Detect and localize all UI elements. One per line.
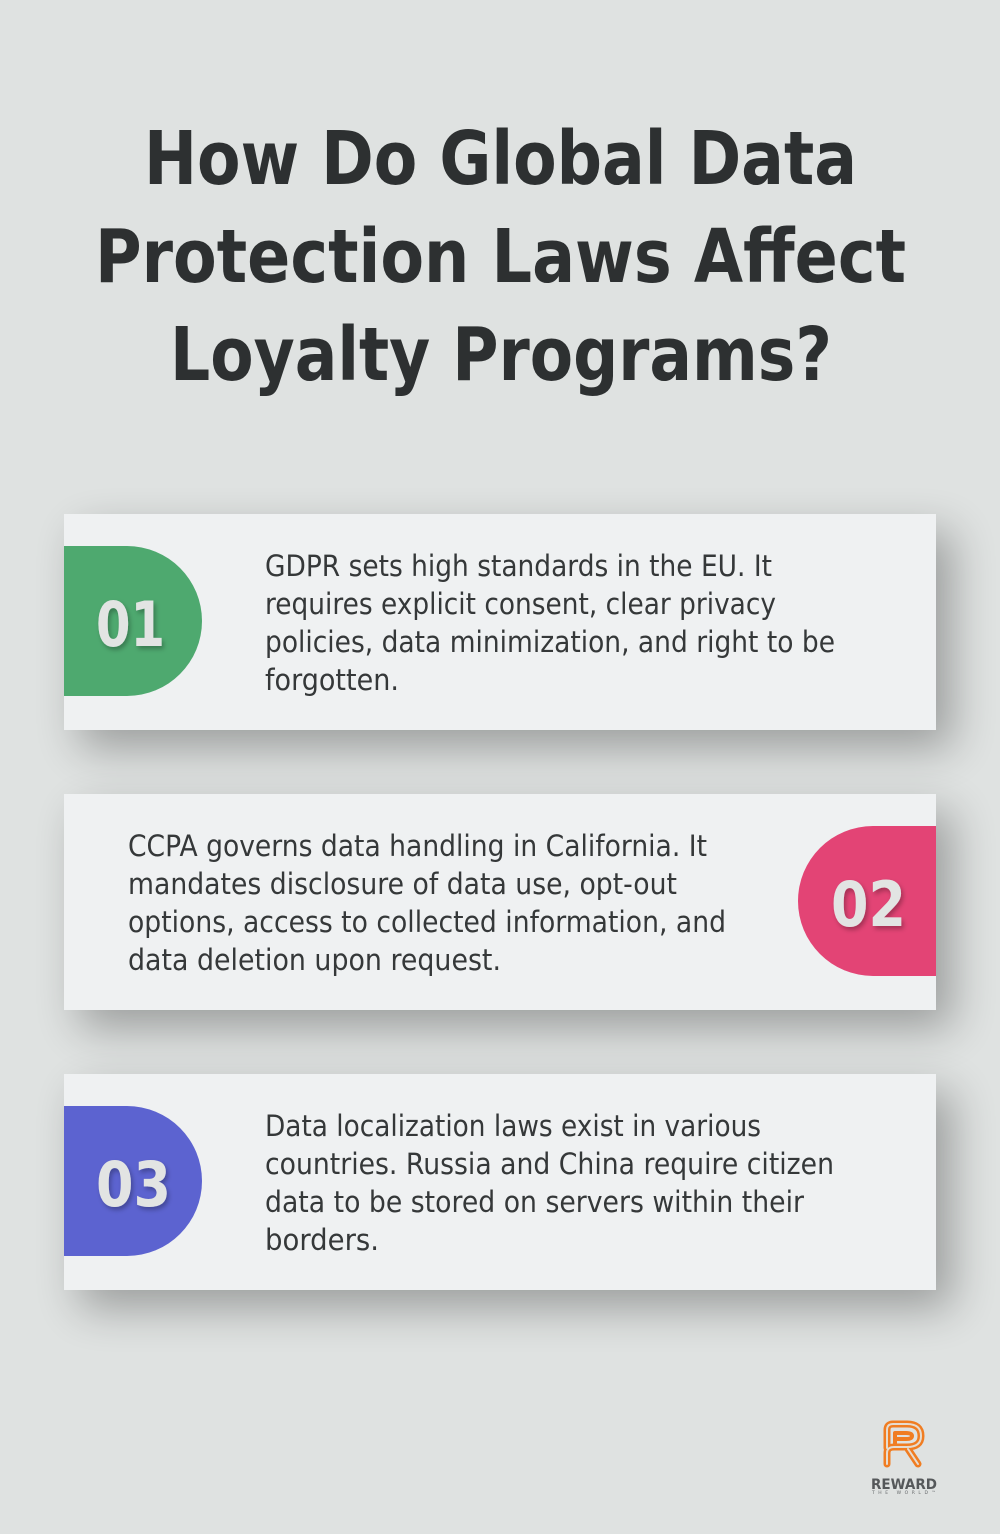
badge: 01 — [64, 546, 202, 696]
logo wordmark: REWARD — [871, 1477, 937, 1493]
text: data localization description: countries. Russia and China require citizen — [265, 1147, 834, 1181]
text: data localization description: Data localization laws exist in various — [265, 1109, 761, 1143]
text: CCPA description: CCPA governs data handling in California. It — [128, 829, 707, 863]
text: data localization description — [265, 1109, 834, 1257]
text: GDPR description: requires explicit consent, clear privacy — [265, 587, 776, 621]
logo tagline: THE WORLD™ — [871, 1490, 936, 1496]
icon: orange R — [887, 1424, 921, 1464]
text: CCPA description: mandates disclosure of data use, opt-out — [128, 867, 677, 901]
text: GDPR description: GDPR sets high standards in the EU. It — [265, 549, 772, 583]
badge: 02 — [798, 826, 936, 976]
badge: 01: 01 — [96, 588, 165, 661]
text: CCPA description: data deletion upon request. — [128, 943, 501, 977]
text: CCPA description — [128, 829, 726, 977]
title: How Do Global Data — [144, 116, 857, 202]
text: GDPR description: forgotten. — [265, 663, 399, 697]
panel: CCPA card — [64, 794, 952, 1028]
text: data localization description: data to be stored on servers within their — [265, 1185, 805, 1219]
badge: 03: 03 — [96, 1148, 171, 1221]
title: Loyalty Programs? — [170, 312, 832, 398]
title — [95, 116, 906, 398]
logo: Reward the World — [871, 1424, 937, 1496]
panel: GDPR card — [64, 514, 952, 748]
text: CCPA description: options, access to collected information, and — [128, 905, 726, 939]
text: GDPR description: policies, data minimization, and right to be — [265, 625, 835, 659]
text: GDPR description — [265, 549, 835, 697]
badge: 03 — [64, 1106, 202, 1256]
panel: data localization card — [64, 1074, 952, 1308]
text: data localization description: borders. — [265, 1223, 379, 1257]
badge: 02: 02 — [831, 868, 906, 941]
